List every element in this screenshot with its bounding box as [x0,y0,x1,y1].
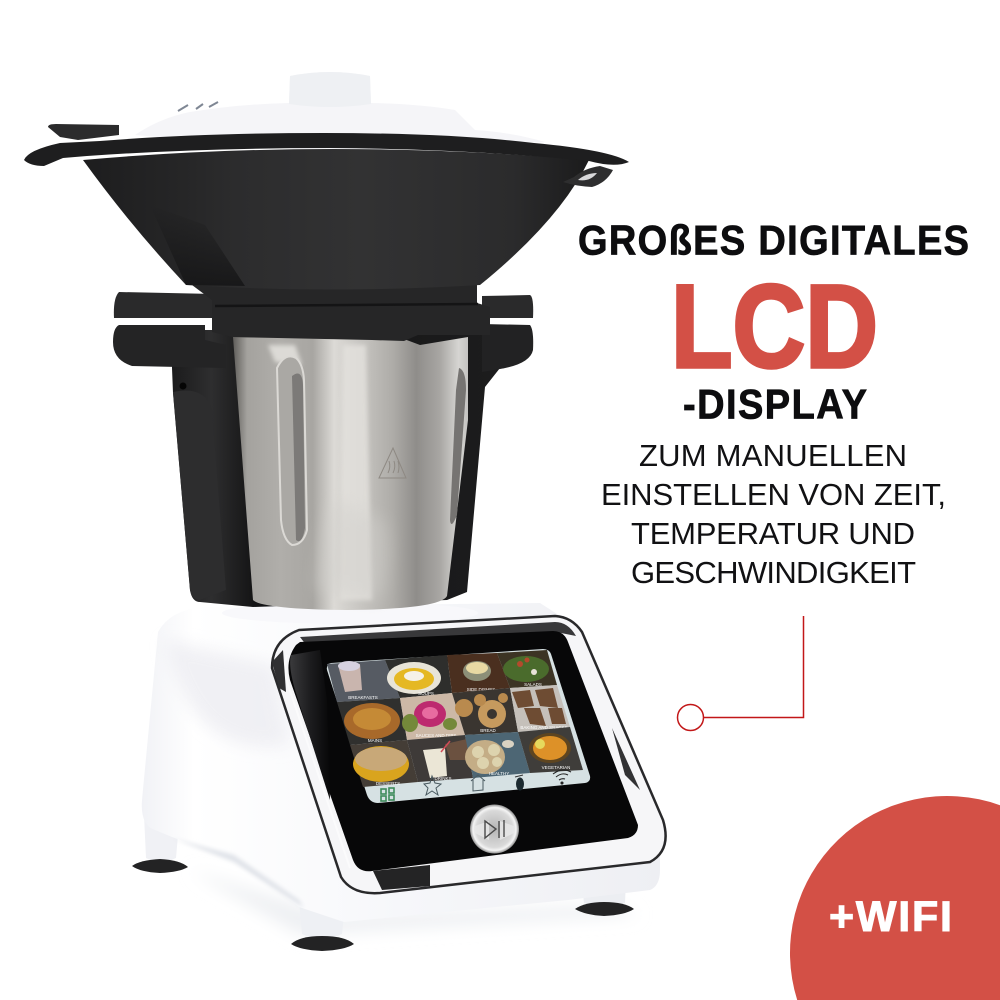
nav icon: wifi [553,770,571,784]
nav icon: timer [515,775,524,790]
recipe tile: side dishes: SIDE DISHES [467,687,495,692]
icon: hot surface warning [379,448,406,478]
recipe tile: mains: MAINS [368,738,382,743]
control panel [272,616,666,893]
recipe tile: healthy [465,732,530,778]
recipe tile: baking and snacks [510,685,570,732]
start/stop button [470,804,519,854]
nav icon: home [471,775,485,791]
badge: +WIFI: +WIFI [829,893,952,941]
recipe tile: bread [452,688,518,735]
recipe tile: side dishes [447,653,510,693]
status bar [414,653,500,664]
product: food processor [24,72,666,951]
nav icon: star [424,776,441,795]
steamer rim and handles [24,124,629,187]
recipe tile: mains [337,698,407,745]
white lid [135,72,545,152]
recipe tile: sauces and dips [400,693,465,740]
LCD background [327,649,590,803]
white base [142,602,660,922]
black screen surround [288,631,638,871]
description text [601,438,946,590]
recipe tile: salads: SALADS [524,682,542,687]
description text: EINSTELLEN VON ZEIT, [601,477,946,512]
recipe tile: soups [385,655,452,698]
LCD screen [327,649,590,803]
recipe tile: drinks [407,735,473,782]
callout connector [678,616,804,730]
recipe tile: soups: SOUPS [418,691,434,696]
headline: -Display: -DISPLAY [683,382,867,428]
floor shadow [190,870,640,935]
left slot [277,356,307,545]
recipe tile: sauces and dips: SAUCES AND DIPS [416,733,456,738]
headline: LCD: LCD [671,261,878,393]
nav icon: grid [381,788,394,801]
recipe tile: desserts: DESSERTS [376,781,400,786]
recipe tile: vegetarian [518,727,583,773]
recipe tile: desserts [350,740,418,787]
description text: GESCHWINDIGKEIT [631,555,916,590]
dark chrome wedge [290,650,330,800]
top dark strip [300,622,576,650]
feet [132,815,634,951]
recipe tile: bread: BREAD [480,728,496,733]
recipe tile: salads [497,650,557,688]
description text: ZUM MANUELLEN [639,438,907,473]
chrome frame [272,616,666,893]
recipe tile: drinks: DRINKS [434,776,452,781]
description text: TEMPERATUR UND [631,516,915,551]
recipe tile: baking and snacks: BAKING AND SNACKS [520,725,568,730]
steel pot [233,337,468,610]
left chrome highlight [285,655,350,868]
recipe tile: vegetarian: VEGETARIAN [542,765,570,770]
recipe tile: breakfasts: BREAKFASTS [348,695,378,700]
recipe tile: healthy: HEALTHY [489,771,509,776]
headline: Großes digitales: GROßES DIGITALES [578,218,969,264]
black jug body [172,330,500,607]
badge: +WIFI [790,796,1000,1000]
right slot [450,368,466,524]
steamer bowl [83,149,589,290]
left reflections [272,650,286,692]
recipe tile: breakfasts [327,660,400,702]
locking bands [113,285,533,372]
